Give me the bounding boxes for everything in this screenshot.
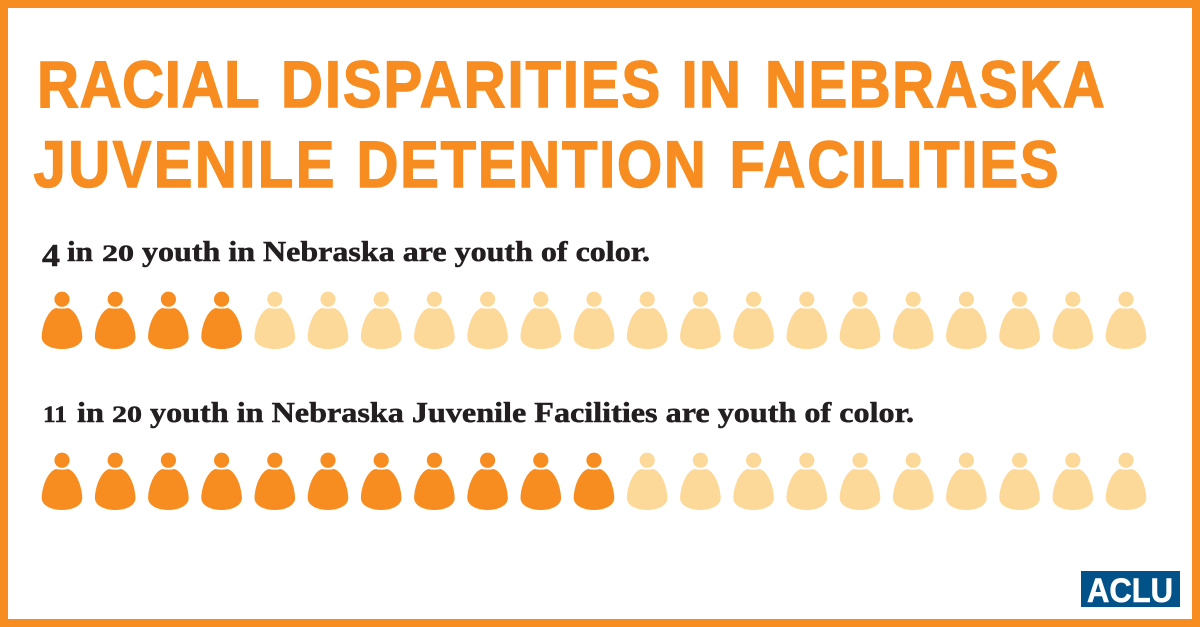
title: DISPARITIES	[281, 49, 660, 122]
title: IN	[682, 49, 741, 122]
title: JUVENILE	[34, 129, 334, 202]
statement: juvenile facilities youth: 20	[112, 402, 142, 427]
statement: state youth: in	[67, 237, 93, 268]
title	[34, 49, 1105, 202]
statement: juvenile facilities youth: youth in Nebraska Juvenile Facilities are youth of color.	[150, 398, 914, 429]
title: RACIAL	[37, 49, 260, 122]
pictogram: 4 in 20 youth	[42, 292, 1146, 349]
statement: state youth: 20	[102, 241, 134, 266]
title: FACILITIES	[730, 129, 1059, 202]
title: NEBRASKA	[765, 49, 1105, 122]
ACLU logo: ACLU	[1087, 572, 1173, 610]
statement: state youth: 4	[42, 237, 60, 273]
statement: state youth	[42, 237, 650, 273]
title: DETENTION	[356, 129, 706, 202]
statement: juvenile facilities youth: in	[77, 398, 104, 429]
statement: juvenile facilities youth: 11	[43, 402, 67, 427]
statement: state youth: youth in Nebraska are youth of color.	[142, 237, 650, 268]
pictogram: 11 in 20 youth	[42, 453, 1146, 510]
